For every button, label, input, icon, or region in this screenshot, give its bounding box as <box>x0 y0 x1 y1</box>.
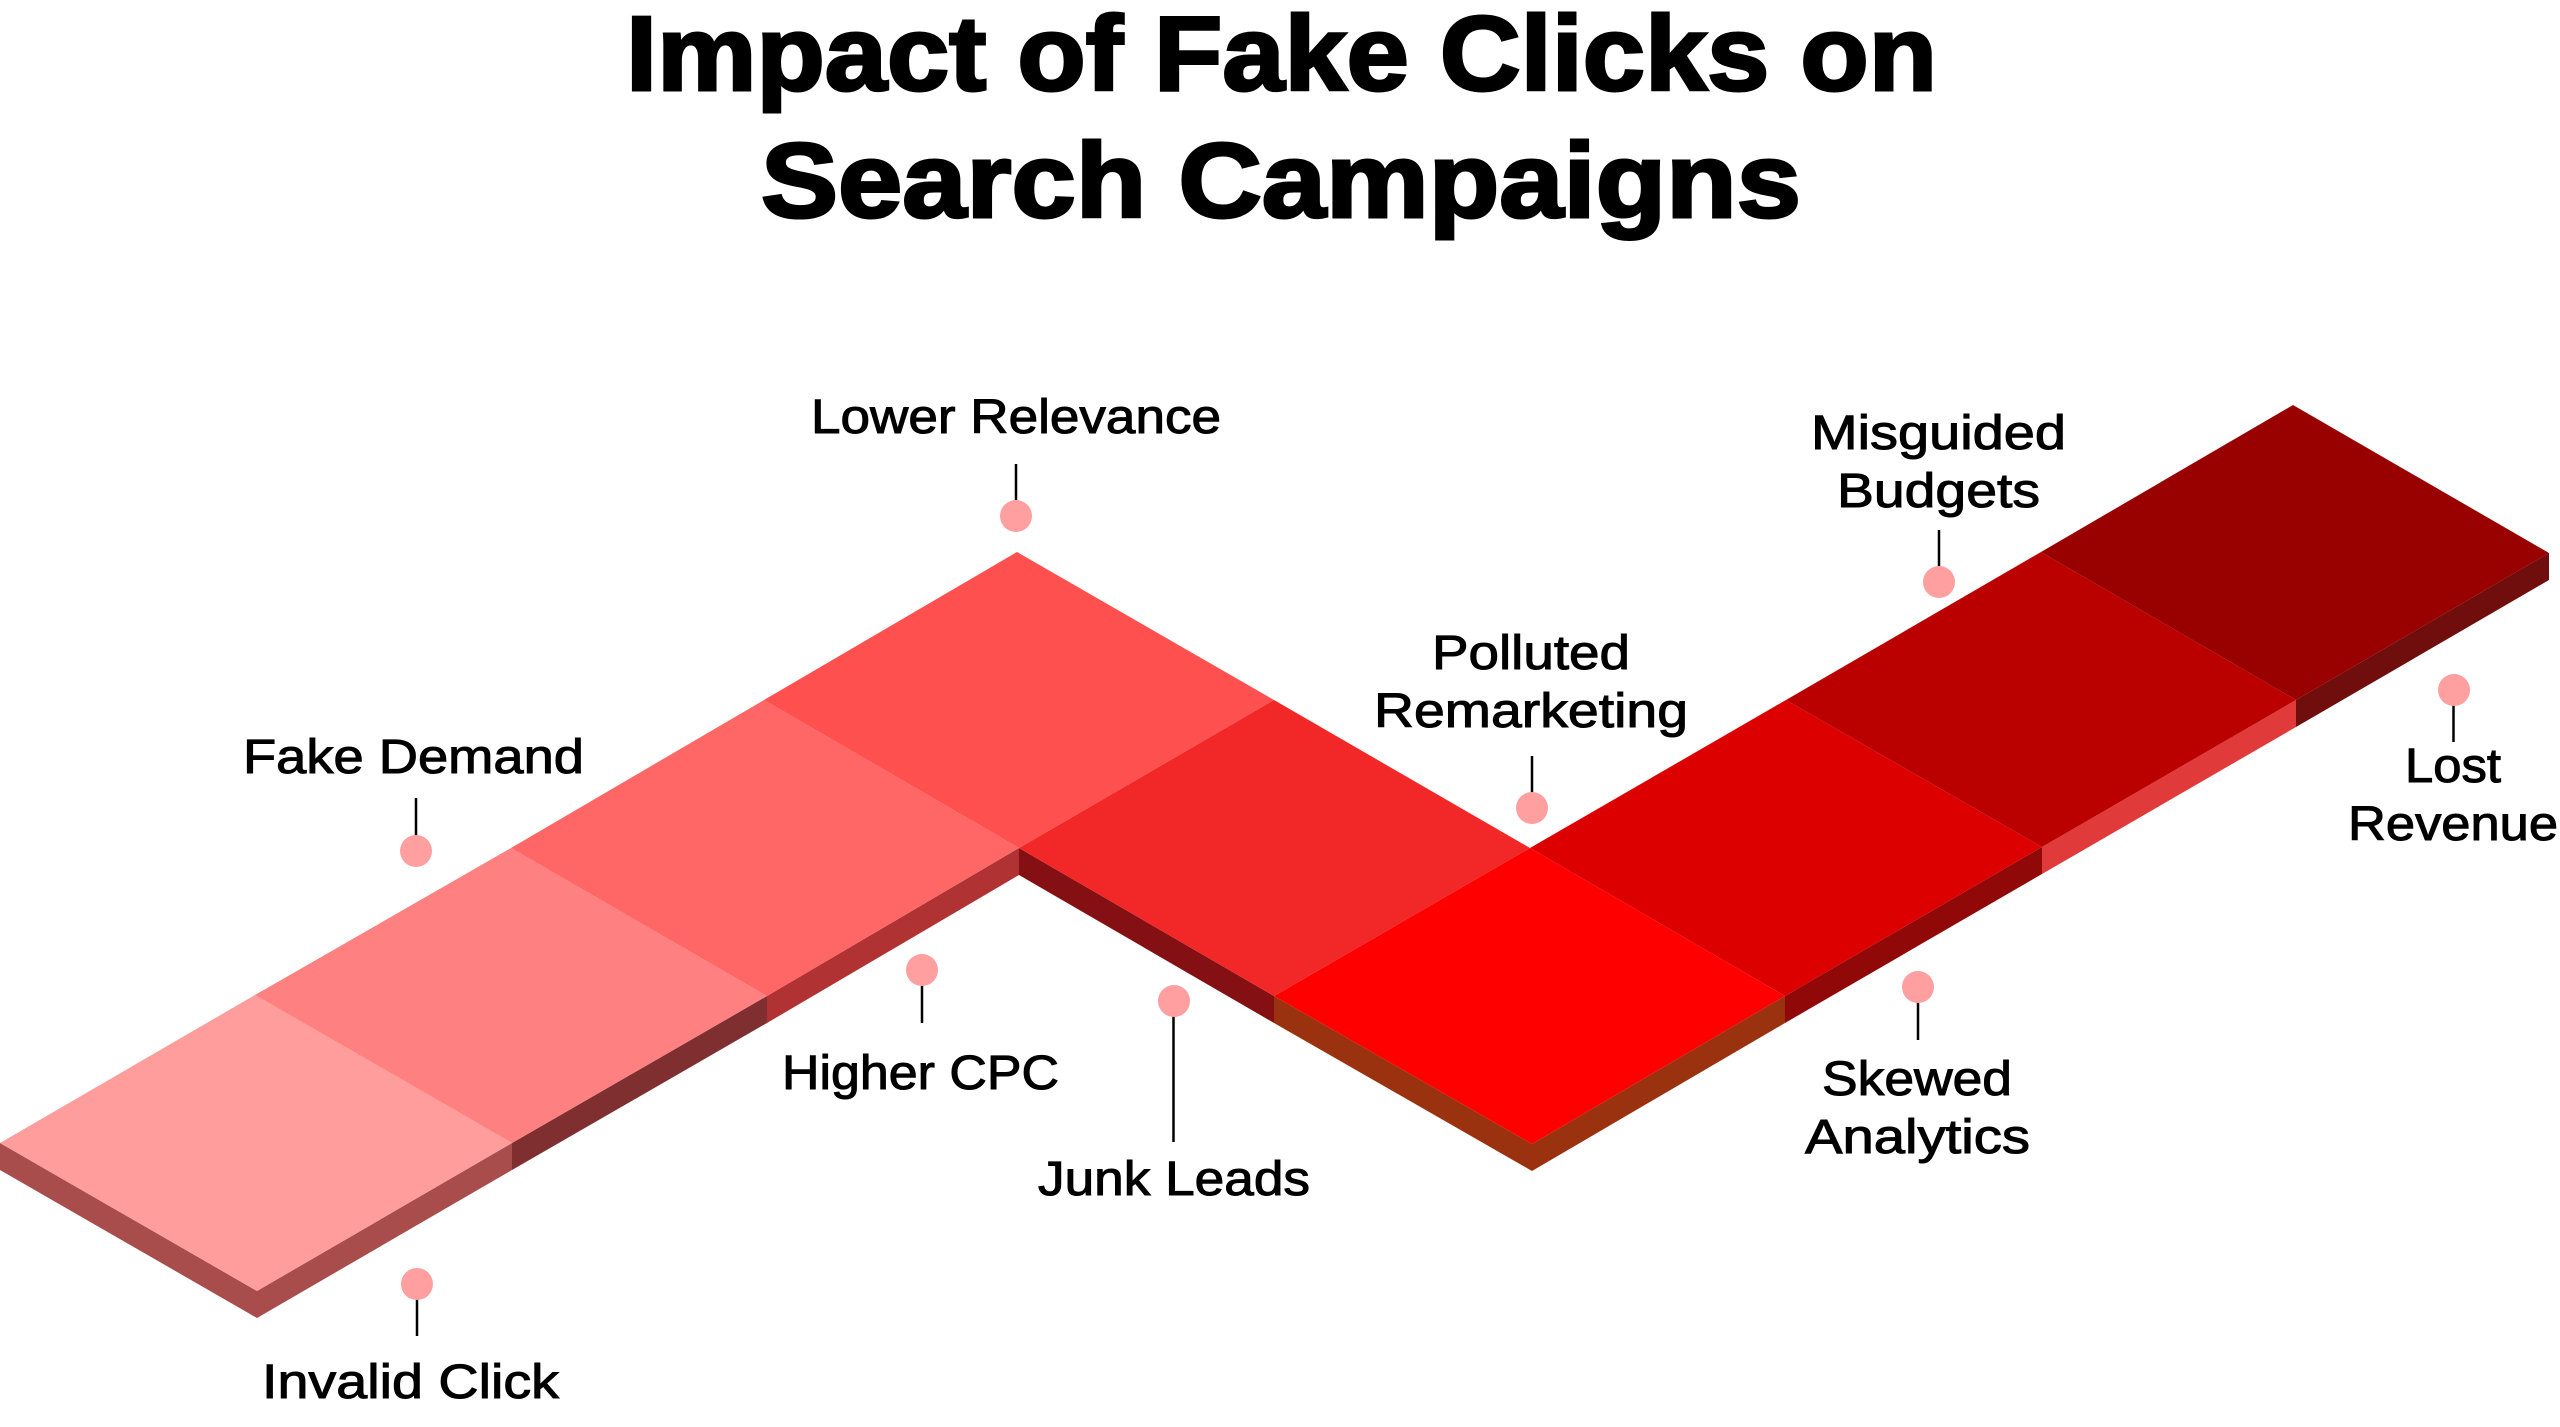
label: polluted remarketing <box>1374 627 1688 824</box>
label: junk leads: Junk Leads <box>1038 1153 1310 1206</box>
label: junk leads <box>1038 985 1310 1206</box>
label: higher CPC <box>782 954 1059 1100</box>
label: misguided budgets <box>1811 407 2066 598</box>
tile 5: junk leads <box>1019 700 1530 1023</box>
label: invalid click <box>262 1268 560 1409</box>
tile 2: fake demand <box>255 848 767 1170</box>
label: misguided budgets: Budgets <box>1837 465 2040 518</box>
label: polluted remarketing: Polluted <box>1432 627 1630 680</box>
label: fake demand <box>243 731 584 867</box>
label: lost revenue <box>2348 674 2558 851</box>
tile 4: lower relevance <box>764 552 1274 848</box>
label: skewed analytics <box>1805 971 2030 1164</box>
label: lost revenue: Lost <box>2405 740 2501 793</box>
label: lower relevance: Lower Relevance <box>811 391 1221 444</box>
label: invalid click: Invalid Click <box>262 1356 560 1409</box>
label: misguided budgets: Misguided <box>1811 407 2066 460</box>
title <box>626 0 1937 240</box>
label: higher CPC: Higher CPC <box>782 1047 1059 1100</box>
label: lower relevance <box>811 391 1221 532</box>
tile 6: skewed centre <box>1274 848 1785 1171</box>
tile 9: lost revenue <box>2041 405 2549 727</box>
tile 3: higher CPC <box>511 700 1019 1023</box>
title: Search Campaigns <box>761 122 1801 240</box>
label: polluted remarketing: Remarketing <box>1374 685 1688 738</box>
tile 8: misguided budgets <box>1786 552 2296 874</box>
tile 1: invalid click <box>0 995 512 1318</box>
label: fake demand: Fake Demand <box>243 731 584 784</box>
isometric path of nine tiles <box>0 405 2549 1318</box>
label: lost revenue: Revenue <box>2348 798 2558 851</box>
label: skewed analytics: Analytics <box>1805 1111 2030 1164</box>
label: skewed analytics: Skewed <box>1822 1053 2012 1106</box>
tile 7: polluted remarketing <box>1530 700 2042 1023</box>
